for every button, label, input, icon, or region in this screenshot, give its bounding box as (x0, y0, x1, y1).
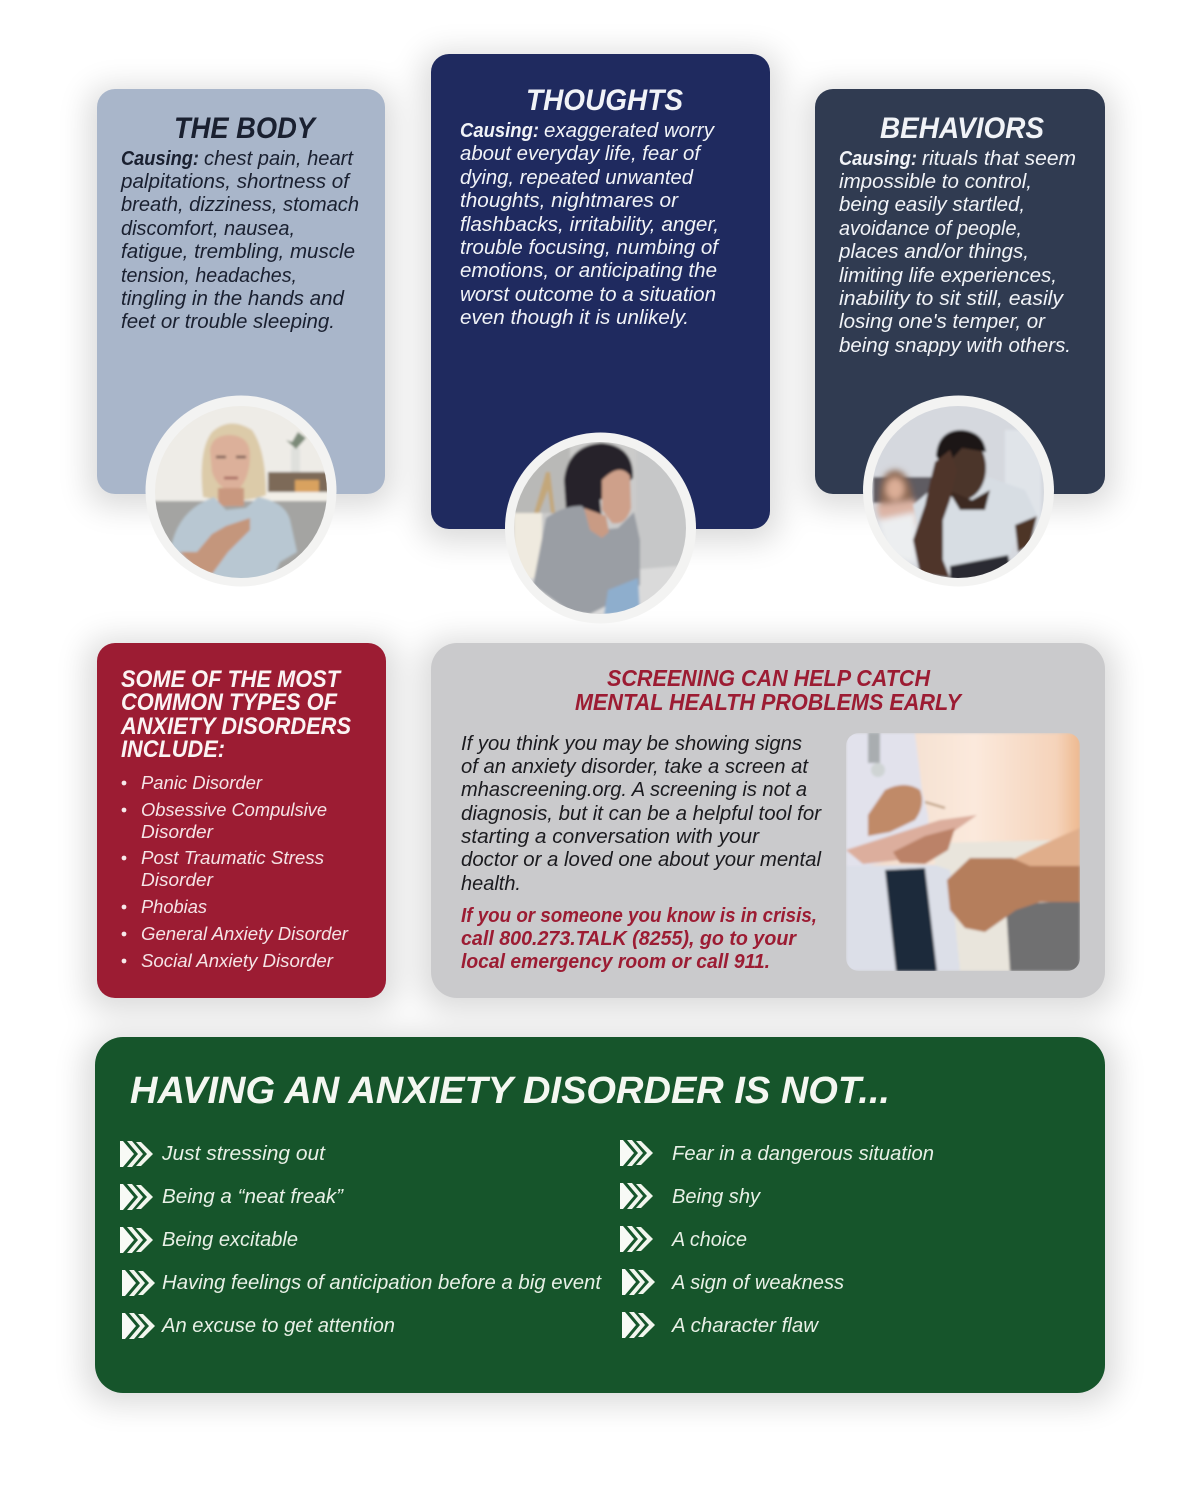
item: fear in a dangerous situation: Fear in a dangerous situation (672, 1143, 934, 1165)
item: excuse to get attention: An excuse to get attention (161, 1315, 395, 1337)
text: thought symptoms: about everyday life, fear of (460, 143, 702, 165)
text: body symptoms: chest pain, heart (204, 148, 354, 170)
text: screening description: doctor or a loved one about your mental (461, 849, 822, 871)
item: a sign of weakness: A sign of weakness (671, 1272, 844, 1294)
text: body symptoms (120, 148, 359, 333)
text: screening description: diagnosis, but it can be a helpful tool for (461, 803, 822, 825)
text: body symptoms: breath, dizziness, stomach (121, 194, 359, 216)
list: disorder types: Post Traumatic Stress (141, 848, 324, 868)
item: being a neat freak (120, 1184, 344, 1210)
text: body symptoms: discomfort, nausea, (121, 218, 295, 240)
text: screening description: mhascreening.org. A screening is not a (461, 779, 807, 801)
item: being shy: Being shy (672, 1186, 761, 1208)
list: disorder types (122, 773, 349, 971)
list: disorder types: Disorder (141, 870, 214, 890)
text: body symptoms: feet or trouble sleeping. (121, 311, 335, 333)
item: being excitable (120, 1227, 298, 1253)
heading: common types: COMMON TYPES OF (121, 689, 338, 716)
text: crisis callout: local emergency room or call 911. (461, 951, 770, 973)
text: thought symptoms: emotions, or anticipating the (460, 260, 717, 282)
item: being a neat freak: Being a “neat freak” (162, 1186, 344, 1208)
text: thought symptoms: trouble focusing, numbing of (460, 237, 720, 259)
photo: stressed man (863, 396, 1054, 586)
text: behavior symptoms: impossible to control, (839, 171, 1032, 193)
text: behavior symptoms: being easily startled, (839, 194, 1025, 216)
text: thought symptoms: Causing: (460, 120, 539, 142)
text: behavior symptoms: Causing: (839, 148, 917, 170)
list: disorder types: Obsessive Compulsive (141, 800, 327, 820)
text: screening description (461, 733, 822, 895)
item: being shy (620, 1183, 761, 1209)
item: just stressing out: Just stressing out (161, 1143, 327, 1165)
item: a choice (620, 1226, 747, 1252)
heading: the body: THE BODY (174, 112, 318, 145)
text: thought symptoms: even though it is unlikely. (460, 307, 689, 329)
item: being excitable: Being excitable (162, 1229, 298, 1251)
text: behavior symptoms: places and/or things, (838, 241, 1029, 263)
heading: common types: SOME OF THE MOST (121, 666, 342, 693)
text: screening description: starting a conversation with your (461, 826, 760, 848)
heading: common types (120, 666, 351, 763)
list: disorder types: Disorder (141, 822, 214, 842)
heading: screening (575, 665, 963, 715)
text: behavior symptoms: avoidance of people, (839, 218, 1022, 240)
panel: types of anxiety disorders (97, 643, 386, 998)
text: crisis callout: call 800.273.TALK (8255), go to your (461, 928, 797, 950)
text: behavior symptoms (838, 148, 1076, 357)
text: thought symptoms: flashbacks, irritability, anger, (460, 214, 719, 236)
heading: thoughts: THOUGHTS (526, 84, 683, 117)
text: behavior symptoms: inability to sit still, easily (839, 288, 1064, 310)
heading: behaviors: BEHAVIORS (880, 112, 1044, 145)
item: just stressing out (120, 1141, 327, 1167)
photo: woman holding chest (146, 396, 336, 586)
panel: screening (431, 643, 1105, 998)
text: crisis callout: If you or someone you know is in crisis, (461, 905, 817, 927)
list: disorder types: Social Anxiety Disorder (141, 951, 334, 971)
text: thought symptoms (460, 120, 720, 329)
panel shadows (85, 53, 1115, 1403)
heading: common types: ANXIETY DISORDERS (120, 713, 351, 740)
text: thought symptoms: dying, repeated unwanted (460, 167, 694, 189)
text: behavior symptoms: limiting life experiences, (839, 265, 1057, 287)
panel: the body (97, 89, 385, 494)
panel: thoughts (431, 54, 770, 529)
text: crisis callout (461, 905, 817, 973)
heading: screening: SCREENING CAN HELP CATCH (607, 665, 930, 691)
heading: having an anxiety disorder is not: HAVING AN ANXIETY DISORDER IS NOT... (130, 1070, 890, 1112)
list: disorder types: Panic Disorder (141, 773, 263, 793)
item: feelings of anticipation: Having feelings of anticipation before a big event (162, 1272, 602, 1294)
photo: doctor and patient (846, 733, 1080, 971)
text: screening description: health. (461, 873, 521, 895)
item: a character flaw: A character flaw (671, 1315, 820, 1337)
text: body symptoms: Causing: (121, 148, 199, 170)
text: behavior symptoms: losing one's temper, or (839, 311, 1046, 333)
text: screening description: of an anxiety disorder, take a screen at (461, 756, 809, 778)
text: behavior symptoms: rituals that seem (922, 148, 1076, 170)
text: body symptoms: fatigue, trembling, muscle (121, 241, 355, 263)
text: body symptoms: tingling in the hands and (121, 288, 345, 310)
heading: common types: INCLUDE: (121, 736, 225, 763)
text: screening description: If you think you may be showing signs (461, 733, 802, 755)
text: thought symptoms: worst outcome to a situation (460, 284, 716, 306)
text: body symptoms: tension, headaches, (121, 265, 297, 287)
text: thought symptoms: thoughts, nightmares or (460, 190, 679, 212)
item: fear in a dangerous situation (620, 1140, 934, 1166)
list: disorder types: General Anxiety Disorder (141, 924, 349, 944)
heading: screening: MENTAL HEALTH PROBLEMS EARLY (575, 689, 963, 715)
text: behavior symptoms: being snappy with others. (839, 335, 1071, 357)
text: body symptoms: palpitations, shortness of (120, 171, 352, 193)
item: a character flaw (622, 1312, 820, 1338)
text: thought symptoms: exaggerated worry (544, 120, 715, 142)
item: a sign of weakness (622, 1269, 844, 1295)
panel: behaviors (815, 89, 1105, 494)
panel: having an anxiety disorder is not (95, 1037, 1105, 1393)
list: disorder types: Phobias (141, 897, 207, 917)
item: a choice: A choice (671, 1229, 747, 1251)
photo: worried woman (505, 432, 696, 624)
